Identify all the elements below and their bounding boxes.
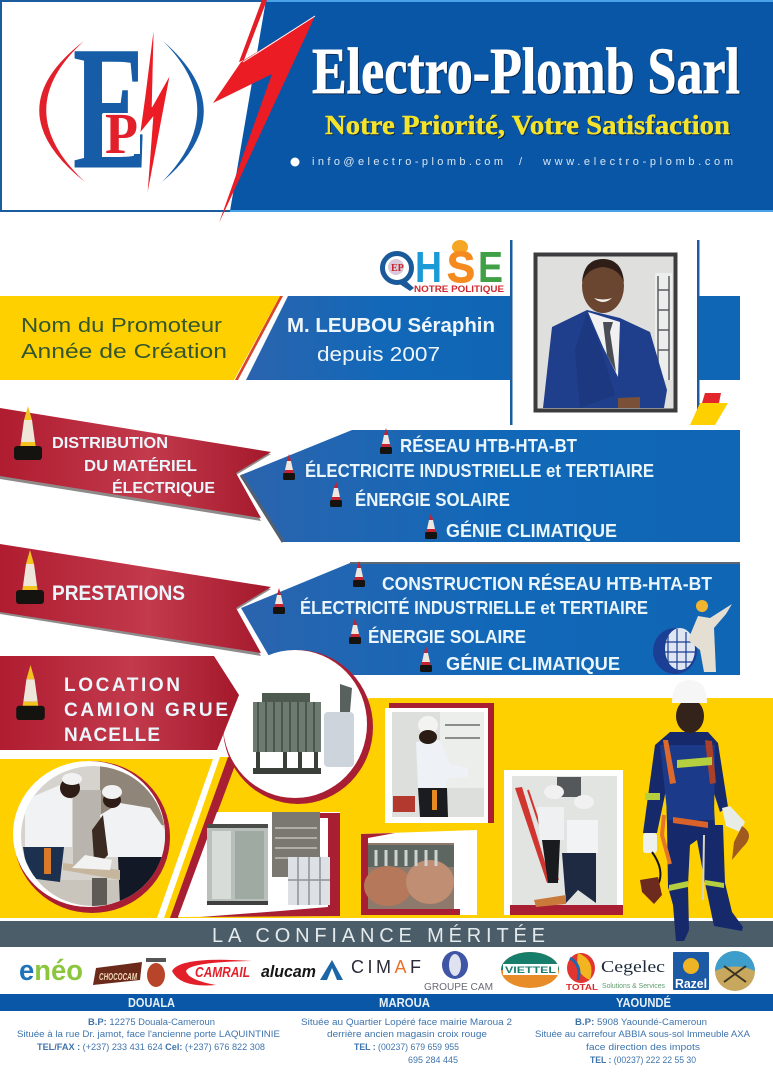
icon: globe and mascot: [653, 600, 732, 674]
address: Yaoundé: [535, 1017, 750, 1065]
list items: ÉLECTRICITÉ INDUSTRIELLE et TERTIAIRE: [300, 597, 648, 618]
logo: QHSE: [382, 240, 504, 294]
logo: cegelec: [601, 957, 666, 990]
promoter values: [287, 315, 495, 366]
panel: header: [1, 0, 773, 223]
logo: groupe cam: [424, 951, 493, 993]
photo: workers with ladder: [504, 770, 623, 915]
address: Maroua: TEL : (00237) 679 659 955: [354, 1042, 459, 1052]
banner label: NACELLE: [64, 725, 160, 746]
address: Douala: TEL/FAX : (+237) 233 431 624 Cel: (+237) 676 822 308: [37, 1042, 265, 1052]
list items: ÉLECTRICITE INDUSTRIELLE et TERTIAIRE: [305, 460, 654, 481]
band: slogan: [0, 921, 773, 947]
band: city names: [0, 994, 773, 1011]
tagline: Notre Priorité, Votre Satisfaction: [325, 110, 730, 140]
logo: EP: E: [73, 11, 148, 206]
logo: groupe cam: GROUPE CAM: [424, 982, 493, 993]
logo: cegelec: Cegelec: [601, 957, 666, 976]
list items: RÉSEAU HTB-HTA-BT: [400, 435, 577, 456]
photo: worker with harness: [640, 680, 749, 941]
logos row: [19, 951, 755, 993]
logo: QHSE: H: [415, 243, 442, 292]
panel: promoter band: [0, 296, 740, 380]
logo: QHSE: S: [447, 243, 475, 292]
list items: GÉNIE CLIMATIQUE: [446, 653, 620, 674]
address: Yaoundé: face direction des impots: [586, 1042, 701, 1052]
band: city names: MAROUA: [379, 995, 431, 1010]
logo: viettel: [501, 952, 559, 988]
banner label: [52, 435, 215, 497]
icon: red lightning bolt: [213, 0, 315, 223]
logo: chococam: [93, 958, 166, 987]
photo: worker at panel: [385, 703, 494, 823]
logo: emblem: [715, 951, 755, 991]
banner label: PRESTATIONS: [52, 582, 185, 605]
photo: workers circle: [13, 761, 170, 913]
list items: ÉNERGIE SOLAIRE: [355, 489, 510, 510]
band: city names: DOUALA: [128, 995, 176, 1010]
list items: ÉNERGIE SOLAIRE: [368, 626, 526, 647]
address: Maroua: Située au Quartier Lopéré face mairie Maroua 2: [301, 1017, 512, 1027]
address: Yaoundé: Située au carrefour ABBIA sous-sol Immeuble AXA: [535, 1029, 750, 1039]
logo: alucam: alucam: [261, 962, 316, 981]
promoter labels: Année de Création: [21, 341, 227, 363]
list items: [300, 573, 712, 674]
contact line: www.electro-plomb.com: [542, 156, 733, 168]
logo: razel: Razel: [675, 976, 707, 991]
contact line: info@electro-plomb.com: [312, 156, 503, 168]
address: Yaoundé: B.P: 5908 Yaoundé-Cameroun: [575, 1017, 707, 1027]
logo: QHSE: NOTRE POLITIQUE: [414, 284, 504, 294]
logo: total: [566, 953, 598, 992]
address: Maroua: derrière ancien magasin croix rouge: [327, 1029, 487, 1039]
logo: eneo: enéo: [19, 955, 83, 987]
logo: QHSE: EP: [391, 263, 404, 274]
banner label: [64, 675, 228, 746]
address: Maroua: [301, 1017, 512, 1065]
banner label: DISTRIBUTION: [52, 435, 168, 452]
logo: razel: [673, 952, 709, 991]
list items: GÉNIE CLIMATIQUE: [446, 520, 617, 541]
list items: [305, 435, 654, 541]
promoter labels: [21, 315, 227, 363]
promoter labels: Nom du Promoteur: [21, 315, 222, 337]
logo: alucam: [261, 960, 343, 981]
panel: prestations banner: [0, 544, 271, 656]
address: Douala: B.P: 12275 Douala-Cameroun: [88, 1017, 215, 1027]
banner label: DU MATÉRIEL: [84, 456, 197, 475]
contact line: [290, 156, 733, 168]
promoter values: M. LEUBOU Séraphin: [287, 315, 495, 337]
banner label: CAMION GRUE: [64, 700, 228, 721]
panel: distribution list: [241, 428, 740, 542]
panel: prestations list: [241, 561, 740, 675]
photo: electrical cabinets: [178, 812, 340, 917]
logo: camrail: [172, 960, 252, 985]
logo: cegelec: Solutions & Services: [602, 983, 665, 990]
address: Maroua: 695 284 445: [408, 1055, 458, 1065]
photo: transformer circle: [223, 650, 373, 804]
photo: cable reels: [361, 830, 477, 915]
banner label: ÉLECTRIQUE: [112, 478, 215, 497]
panel: yellow photo area: [0, 698, 773, 918]
logo: EP: P: [105, 101, 138, 166]
logo: camrail: CAMRAIL: [195, 964, 250, 981]
logo: chococam: CHOCOCAM: [99, 972, 137, 983]
logo: cimaf: CIMAF: [351, 957, 421, 977]
address: Yaoundé: TEL : (00237) 222 22 55 30: [590, 1055, 696, 1065]
band: slogan: LA CONFIANCE MÉRITÉE: [212, 924, 545, 947]
contact line: /: [519, 156, 523, 168]
address: Douala: Située à la rue Dr. jamot, face l'ancienne porte LAQUINTINIE: [17, 1029, 280, 1039]
panel: distribution banner: [0, 406, 271, 521]
logo: QHSE: E: [478, 243, 503, 292]
panel: location banner: [0, 656, 239, 750]
logo: total: TOTAL: [566, 982, 598, 992]
logo: viettel: VIETTEL: [505, 965, 556, 976]
banner label: LOCATION: [64, 675, 180, 696]
band: city names: YAOUNDÉ: [616, 995, 671, 1010]
photo: promoter portrait: [510, 240, 700, 425]
icon: yellow and red flag: [690, 393, 728, 425]
address: Douala: [17, 1017, 280, 1052]
list items: CONSTRUCTION RÉSEAU HTB-HTA-BT: [382, 573, 712, 594]
promoter values: depuis 2007: [317, 344, 440, 366]
